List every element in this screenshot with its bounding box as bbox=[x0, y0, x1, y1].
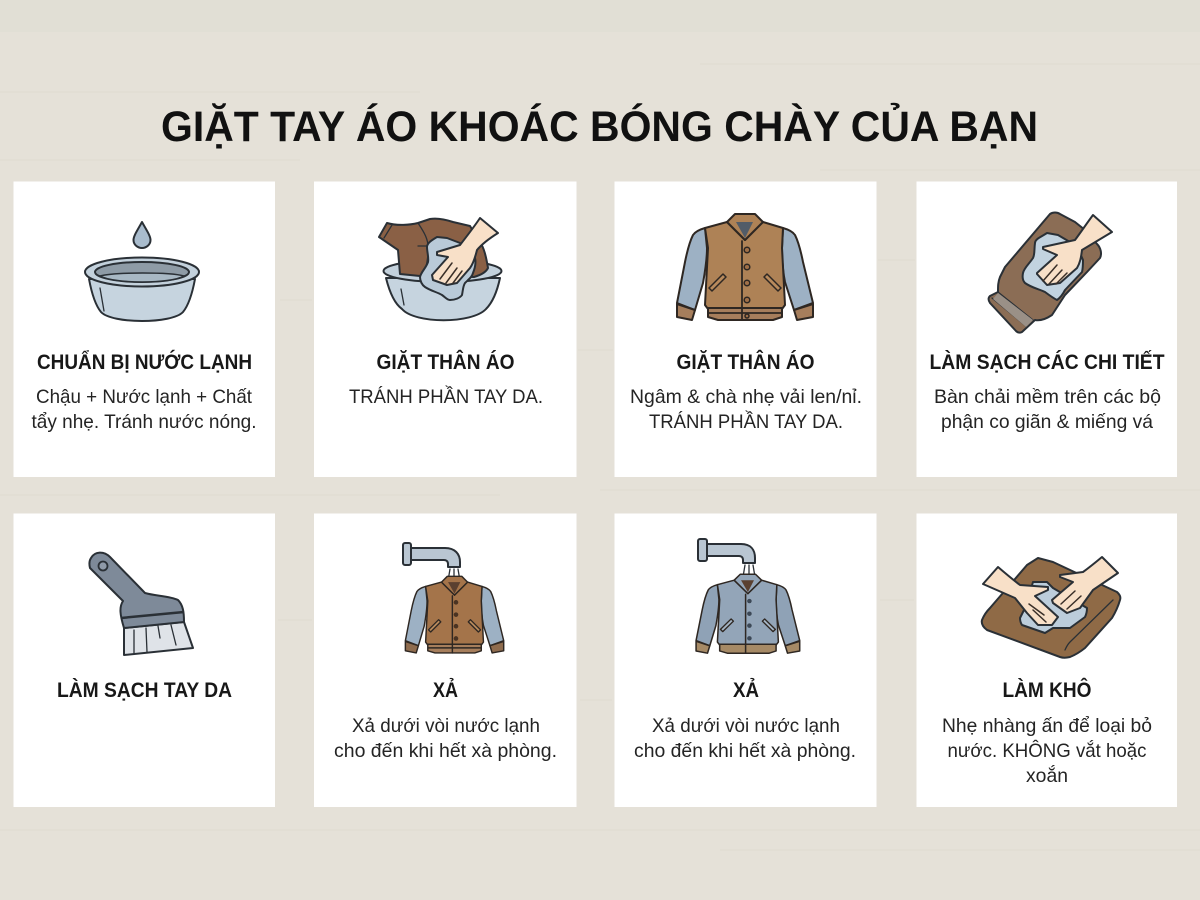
title: GIẶT TAY ÁO KHOÁC BÓNG CHÀY CỦA BẠN bbox=[161, 102, 1038, 151]
description: Xả dưới vòi nước lạnh bbox=[352, 715, 540, 737]
icon: soft brush bbox=[89, 553, 193, 655]
description: Nhẹ nhàng ấn để loại bỏ bbox=[942, 715, 1152, 737]
heading: LÀM SẠCH CÁC CHI TIẾT bbox=[930, 351, 1165, 374]
description: Ngâm & chà nhẹ vải len/nỉ. bbox=[630, 386, 862, 408]
description: cho đến khi hết xà phòng. bbox=[334, 740, 557, 762]
icon: water drop and basin bbox=[85, 222, 199, 321]
description: Xả dưới vòi nước lạnh bbox=[652, 715, 840, 737]
panel: step 2 wash body bbox=[314, 182, 576, 477]
description bbox=[630, 386, 862, 433]
description: Chậu + Nước lạnh + Chất bbox=[36, 386, 253, 408]
description bbox=[334, 715, 557, 762]
heading: GIẶT THÂN ÁO bbox=[676, 350, 814, 374]
heading: GIẶT THÂN ÁO bbox=[376, 350, 514, 374]
icon: faucet over brown jacket bbox=[403, 543, 504, 653]
icon: hand cleaning sleeve cuff bbox=[988, 212, 1112, 333]
panel: step 8 dry bbox=[916, 514, 1177, 807]
panel: step 5 clean leather sleeves bbox=[14, 514, 275, 807]
description: tẩy nhẹ. Tránh nước nóng. bbox=[32, 411, 256, 433]
description bbox=[942, 715, 1152, 787]
description: TRÁNH PHẦN TAY DA. bbox=[349, 385, 543, 408]
heading: CHUẨN BỊ NƯỚC LẠNH bbox=[37, 350, 252, 374]
heading: XẢ bbox=[733, 679, 759, 702]
panel: step 7 rinse blue jacket bbox=[614, 514, 876, 807]
panel: step 6 rinse brown jacket bbox=[314, 514, 576, 807]
description: xoắn bbox=[1026, 764, 1068, 787]
icon: faucet over blue jacket bbox=[696, 539, 800, 653]
description: TRÁNH PHẦN TAY DA. bbox=[649, 410, 843, 433]
panel: step 1 prepare cold water bbox=[14, 182, 275, 477]
icon: jacket washed in basin bbox=[379, 218, 502, 320]
description: cho đến khi hết xà phòng. bbox=[634, 740, 856, 762]
description bbox=[934, 386, 1161, 433]
heading: LÀM SẠCH TAY DA bbox=[57, 679, 232, 702]
icon: hands pressing jacket on towel bbox=[982, 557, 1120, 658]
icon: varsity jacket bbox=[677, 214, 813, 320]
heading: LÀM KHÔ bbox=[1002, 678, 1092, 702]
description: Bàn chải mềm trên các bộ bbox=[934, 386, 1161, 408]
description: nước. KHÔNG vắt hoặc bbox=[948, 739, 1147, 762]
panel: step 3 wash body jacket bbox=[614, 182, 876, 477]
description bbox=[634, 715, 856, 762]
description: phận co giãn & miếng vá bbox=[941, 411, 1153, 433]
heading: XẢ bbox=[433, 679, 458, 702]
description bbox=[32, 386, 256, 433]
panel: step 4 clean details bbox=[916, 182, 1177, 477]
